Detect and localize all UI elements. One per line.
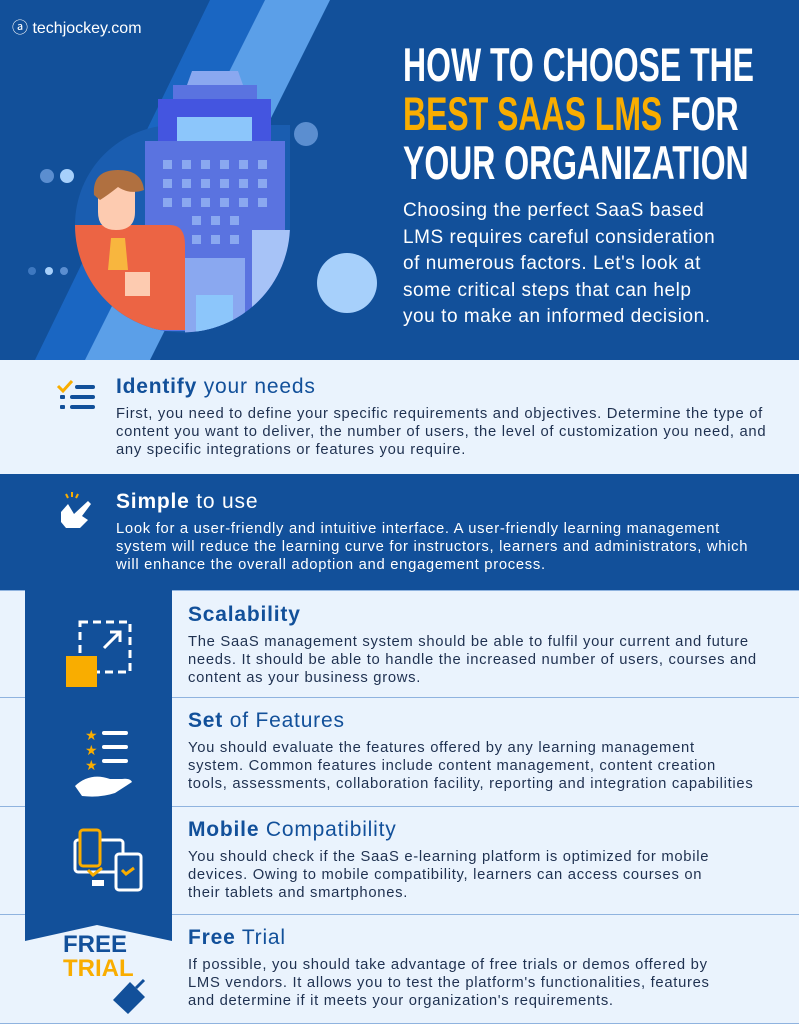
- icon: free trial: TRIAL: [63, 955, 134, 982]
- section: simple to use: will enhance the overall adoption and engagement process.: [116, 557, 546, 573]
- section: identify your needs: any specific integrations or features you require.: [116, 442, 466, 458]
- section: identify your needs: content you want to deliver, the number of users, the level of customization you need, and: [116, 424, 766, 440]
- section: scalability: Scalability: [188, 603, 301, 626]
- icon: checklist: [57, 380, 95, 409]
- intro text: LMS requires careful consideration: [403, 226, 715, 248]
- icon: free trial: FREE: [63, 931, 127, 958]
- icon: features: [75, 727, 132, 797]
- section: mobile compatibility: [0, 807, 799, 915]
- section: mobile compatibility: their tablets and smartphones.: [188, 885, 408, 901]
- section: set of features: [0, 698, 799, 807]
- section: simple to use: [0, 474, 799, 590]
- icon: features: ★: [85, 727, 98, 743]
- section: identify your needs: [0, 360, 799, 474]
- section: simple to use: Look for a user-friendly and intuitive interface. A user-friendly learning management: [116, 521, 720, 537]
- section: set of features: Set of Features: [188, 709, 345, 732]
- section: scalability: [0, 590, 799, 698]
- section: free trial: and determine if it meets your organization's requirements.: [188, 993, 614, 1009]
- intro text: [403, 200, 715, 327]
- section: free trial: If possible, you should take advantage of free trials or demos offered by: [188, 957, 708, 973]
- section: scalability: content as your business grows.: [188, 670, 421, 686]
- ribbon with icons: [25, 590, 172, 1014]
- title: HOW TO CHOOSE THE: [403, 38, 754, 91]
- section: free trial: [0, 915, 799, 1024]
- intro text: some critical steps that can help: [403, 280, 692, 300]
- title: [403, 38, 754, 189]
- icon: features: ★: [85, 757, 98, 773]
- title: BEST SAAS LMS FOR: [403, 87, 739, 140]
- intro text: of numerous factors. Let's look at: [403, 253, 701, 274]
- header panel: [0, 0, 799, 360]
- section: identify your needs: First, you need to define your specific requirements and objectives. Determine the type of: [116, 406, 763, 422]
- intro text: Choosing the perfect SaaS based: [403, 200, 704, 221]
- icon: hand tap: [61, 492, 91, 528]
- intro text: you to make an informed decision.: [403, 306, 711, 327]
- icon: free trial: [63, 931, 145, 1014]
- icon: features: ★: [85, 742, 98, 758]
- title: YOUR ORGANIZATION: [403, 136, 749, 189]
- section: free trial: LMS vendors. It allows you to test the platform's functionalities, features: [188, 975, 710, 991]
- section: set of features: system. Common features include content management, content creation: [188, 758, 716, 774]
- logo: techjockey.com: ⓐ techjockey.com: [12, 20, 142, 37]
- section: scalability: The SaaS management system should be able to fulfil your current and future: [188, 634, 749, 650]
- section: simple to use: system will reduce the learning curve for instructors, learners and administrators, which: [116, 539, 748, 555]
- section: mobile compatibility: You should check if the SaaS e-learning platform is optimized for mobile: [188, 849, 709, 865]
- illustration: [75, 71, 290, 338]
- section: mobile compatibility: Mobile Compatibility: [188, 818, 397, 841]
- section: free trial: Free Trial: [188, 926, 286, 949]
- section: simple to use: Simple to use: [116, 490, 258, 513]
- icon: devices: [75, 830, 141, 890]
- section: mobile compatibility: devices. Owing to mobile compatibility, learners can access courses on: [188, 867, 702, 883]
- section: scalability: needs. It should be able to handle the increased number of users, courses and: [188, 652, 757, 668]
- section: set of features: tools, assessments, collaboration facility, reporting and integration capabilities: [188, 776, 753, 792]
- section: set of features: You should evaluate the features offered by any learning management: [188, 740, 695, 756]
- section: identify your needs: Identify your needs: [116, 375, 316, 398]
- icon: scale: [66, 622, 130, 687]
